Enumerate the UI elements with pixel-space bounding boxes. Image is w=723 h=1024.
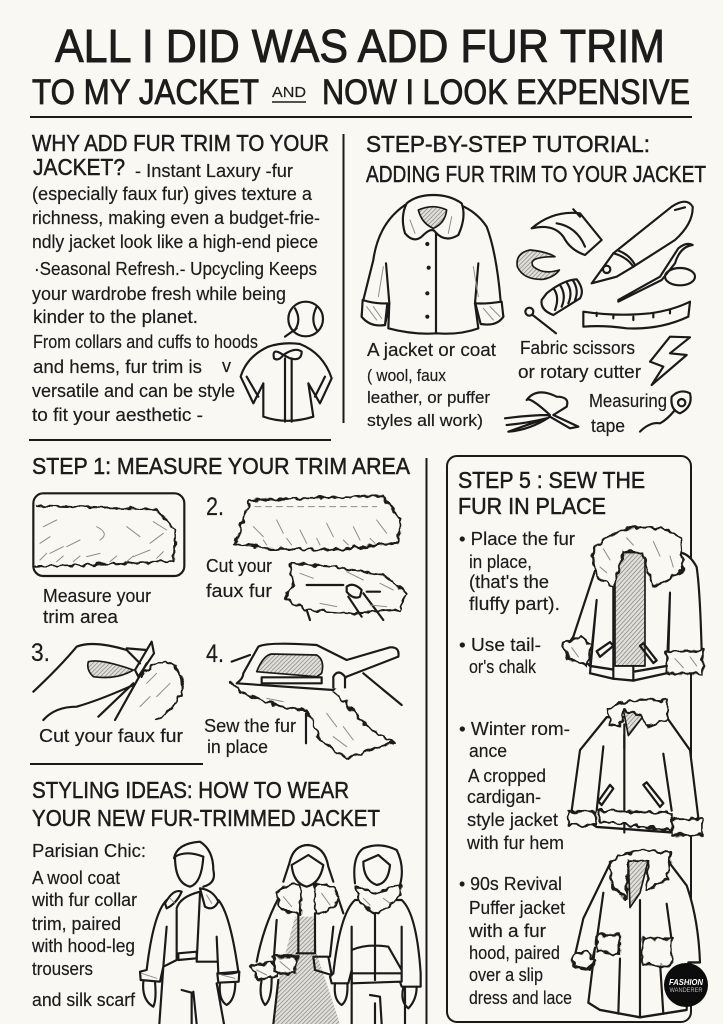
logo: fashion wanderer: FASHION bbox=[669, 977, 704, 987]
text: parisian chic bbox=[31, 841, 146, 1010]
title: ALL I DID WAS ADD FUR TRIM bbox=[55, 20, 665, 72]
caption: fabric scissors bbox=[518, 338, 641, 382]
illustration: jacket with fur collar, open front bbox=[563, 527, 703, 681]
heading: step 5: STEP 5 : SEW THE bbox=[458, 467, 645, 493]
logo: fashion wanderer: WANDERER bbox=[670, 988, 703, 994]
heading: tutorial bbox=[366, 131, 706, 187]
caption: jacket or coat bbox=[367, 340, 496, 430]
text: place the fur bbox=[459, 529, 575, 614]
text: winter romance: style jacket bbox=[467, 810, 558, 830]
heading: why add fur trim bbox=[32, 130, 329, 180]
caption: cut your faux fur bbox=[206, 556, 272, 601]
text: place the fur: (that's the bbox=[469, 572, 549, 592]
text: place the fur: • Place the fur bbox=[459, 529, 575, 549]
heading: step 5: FUR IN PLACE bbox=[458, 493, 606, 519]
text: tailor's chalk: • Use tail- bbox=[459, 635, 541, 655]
text: place the fur: in place, bbox=[469, 552, 532, 572]
icon: yarn ball and shirt bbox=[241, 302, 332, 422]
body text: why add fur trim: your wardrobe fresh while being bbox=[32, 284, 286, 304]
number 2: 2. bbox=[206, 493, 224, 521]
caption: jacket or coat: leather, or puffer bbox=[367, 389, 491, 407]
panel: step-by-step tutorial bbox=[362, 131, 706, 436]
illustration: sewing tools bbox=[505, 202, 695, 432]
illustration: fur swatch in frame bbox=[33, 493, 184, 576]
title bbox=[32, 20, 690, 112]
caption: measure bbox=[43, 586, 151, 627]
body text: why add fur trim: richness, making even a budget-frie- bbox=[32, 208, 320, 228]
caption: sew the fur in place bbox=[204, 716, 296, 757]
panel: styling ideas bbox=[31, 777, 421, 1024]
illustration: figure 2 fur collar and dress bbox=[250, 845, 343, 1024]
text: parisian chic: A wool coat bbox=[32, 868, 120, 888]
heading: styling ideas: YOUR NEW FUR-TRIMMED JACKET bbox=[32, 805, 380, 831]
caption: measure: Measure your bbox=[43, 586, 151, 606]
illustration: finger on fur bbox=[285, 563, 407, 620]
caption: sew the fur in place: in place bbox=[207, 737, 268, 757]
title: TO MY JACKET bbox=[32, 73, 259, 112]
heading: styling ideas bbox=[32, 777, 380, 831]
caption: sew the fur in place: Sew the fur bbox=[204, 716, 296, 736]
text: 90s revival: over a slip bbox=[469, 965, 543, 985]
body text: why add fur trim: and hems, fur trim is bbox=[33, 357, 202, 377]
illustration: cropped jacket with fur hem bbox=[568, 700, 703, 835]
panel: step 5 bbox=[447, 456, 708, 1022]
heading: why add fur trim: WHY ADD FUR TRIM TO YOUR bbox=[32, 130, 329, 156]
text: parisian chic: Parisian Chic: bbox=[32, 841, 146, 861]
text: parisian chic: with hood-leg bbox=[31, 936, 135, 956]
body text: why add fur trim: ndly jacket look like a high-end piece bbox=[32, 232, 318, 252]
illustration: figure 1 open jacket bbox=[140, 842, 239, 1024]
logo: fashion wanderer bbox=[664, 963, 708, 1007]
text: tailor's chalk bbox=[459, 635, 541, 677]
illustration: figure 3 hoodie jacket bbox=[330, 845, 421, 1024]
number 3: 3. bbox=[31, 639, 50, 667]
heading: styling ideas: STYLING IDEAS: HOW TO WEAR bbox=[32, 777, 349, 803]
body text: why add fur trim: (especially faux fur) gives texture a bbox=[32, 184, 313, 204]
text: parisian chic: trim, paired bbox=[32, 914, 121, 934]
body text: why add fur trim: ·Seasonal Refresh.- Upcycling Keeps bbox=[34, 259, 317, 279]
text: winter romance: cardigan- bbox=[467, 787, 541, 807]
body text: why add fur trim: kinder to the planet. bbox=[33, 307, 198, 327]
heading: step 1: STEP 1: MEASURE YOUR TRIM AREA bbox=[32, 453, 411, 479]
caption: cut your faux fur: faux fur bbox=[206, 581, 272, 601]
text: winter romance: ance bbox=[469, 741, 507, 761]
text: tailor's chalk: or's chalk bbox=[469, 657, 537, 677]
caption: measure: trim area bbox=[43, 607, 119, 627]
body text: why add fur trim: versatile and can be style bbox=[32, 381, 235, 401]
illustration: long coat with fur hood bbox=[573, 851, 700, 1017]
illustration: fur strip bbox=[235, 496, 400, 550]
caption: measuring tape bbox=[589, 391, 667, 436]
number 4: 4. bbox=[206, 640, 224, 668]
text: place the fur: fluffy part). bbox=[469, 594, 560, 614]
caption: jacket or coat: A jacket or coat bbox=[367, 340, 496, 360]
text: 90s revival: dress and lace bbox=[469, 988, 572, 1008]
caption: measuring tape: tape bbox=[591, 416, 625, 436]
title: AND bbox=[272, 84, 306, 101]
caption: fabric scissors: or rotary cutter bbox=[518, 362, 641, 382]
caption: cut your faux fur: Cut your bbox=[206, 556, 272, 576]
illustration: sewing tool and fur bbox=[230, 644, 402, 758]
text: 90s revival: hood, paired bbox=[469, 943, 560, 963]
text: parisian chic: with fur collar bbox=[31, 890, 137, 910]
illustration: hand cutting fur bbox=[33, 642, 183, 720]
text: 90s revival bbox=[459, 874, 572, 1008]
panel: why add fur trim bbox=[32, 130, 332, 425]
body text: why add fur trim bbox=[32, 161, 320, 425]
caption: fabric scissors: Fabric scissors bbox=[520, 338, 635, 358]
body text: why add fur trim: v bbox=[222, 356, 231, 376]
illustration: jacket with fur collar and cuffs bbox=[362, 195, 503, 334]
text: 90s revival: Puffer jacket bbox=[469, 898, 565, 918]
caption: measuring tape: Measuring bbox=[589, 391, 667, 411]
text: 90s revival: • 90s Revival bbox=[459, 874, 562, 894]
text: 90s revival: with a fur bbox=[468, 921, 546, 941]
caption: jacket or coat: ( wool, faux bbox=[367, 367, 447, 385]
panel: step 1 bbox=[31, 453, 411, 758]
heading: why add fur trim: JACKET? bbox=[33, 154, 125, 180]
text: parisian chic: and silk scarf bbox=[32, 990, 136, 1010]
body text: why add fur trim: to fit your aesthetic - bbox=[32, 405, 203, 425]
text: parisian chic: trousers bbox=[32, 959, 93, 979]
text: winter romance bbox=[459, 719, 570, 853]
body text: why add fur trim: - Instant Laxury -fur bbox=[135, 161, 293, 181]
body text: why add fur trim: From collars and cuffs to hoods bbox=[33, 332, 258, 352]
caption: jacket or coat: styles all work) bbox=[367, 412, 483, 430]
heading: step 5 bbox=[458, 467, 645, 519]
heading: tutorial: STEP-BY-STEP TUTORIAL: bbox=[366, 131, 650, 157]
text: winter romance: • Winter rom- bbox=[459, 719, 570, 739]
caption: cut your faux fur 3: Cut your faux fur bbox=[39, 726, 183, 746]
text: winter romance: with fur hem bbox=[466, 833, 564, 853]
text: winter romance: A cropped bbox=[468, 766, 546, 786]
